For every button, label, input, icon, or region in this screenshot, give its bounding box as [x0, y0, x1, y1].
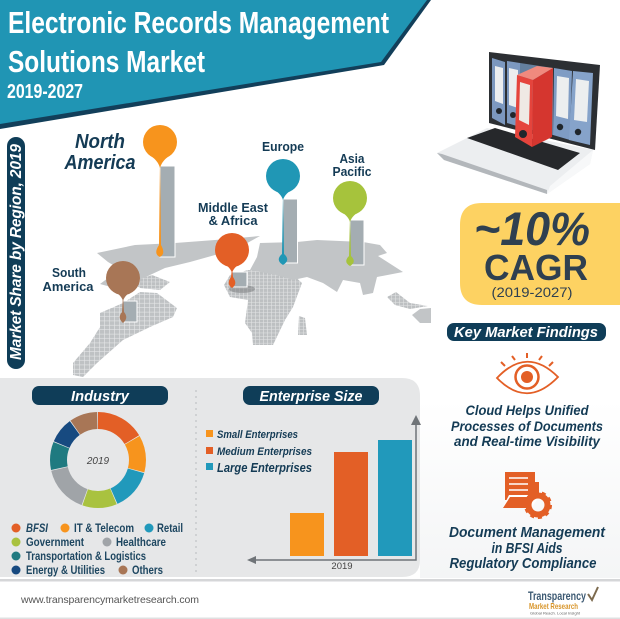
finding: cloud visibility: Processes of Documents	[451, 418, 603, 434]
label: south america: America	[42, 279, 94, 294]
pin: asia pacific	[333, 181, 367, 266]
heading: key market findings: Key Market Findings	[454, 324, 598, 341]
logo: transparency market research: Global Reach. Local Insight	[530, 610, 581, 616]
pin: north america	[143, 125, 177, 257]
title: main heading: Electronic Records Management	[8, 5, 389, 40]
legend: industry: Transportation & Logistics	[26, 549, 146, 563]
right column background	[420, 400, 620, 578]
legend: industry: Healthcare	[116, 535, 166, 549]
label: asia pacific: Pacific	[332, 164, 372, 179]
legend: industry: IT & Telecom	[74, 521, 134, 535]
title banner	[0, 0, 431, 129]
logo: transparency market research: Market Research	[529, 601, 578, 611]
donut chart	[58, 420, 138, 500]
map: central america	[132, 275, 170, 290]
donut centre year: 2019	[86, 456, 110, 467]
legend: industry	[12, 521, 183, 577]
bottom grey panel	[0, 378, 420, 577]
finding: cloud visibility: and Real-time Visibility	[454, 433, 601, 449]
legend: industry: Government	[26, 535, 84, 549]
label: asia pacific: Asia	[340, 151, 365, 166]
callout: cagr: CAGR	[484, 247, 588, 288]
legend: enterprise size: Medium Enterprises	[217, 446, 312, 458]
callout: cagr: (2019-2027)	[492, 284, 572, 300]
bar chart	[247, 415, 421, 572]
logo: transparency market research: Transparency	[528, 591, 586, 603]
finding: document management: Regulatory Compliance	[450, 555, 596, 572]
label: middle east and africa	[198, 200, 269, 228]
legend: enterprise size: Large Enterprises	[217, 461, 312, 475]
title: main heading: 2019-2027	[7, 81, 83, 103]
heading: industry	[32, 386, 168, 405]
map: madagascar	[298, 316, 307, 335]
finding: cloud visibility: Cloud Helps Unified	[466, 402, 589, 418]
legend: industry: BFSI	[26, 521, 49, 535]
finding: cloud visibility	[451, 402, 603, 449]
heading: enterprise size: Enterprise Size	[260, 388, 362, 405]
side label: market share by region: Market Share by Region, 2019	[8, 144, 25, 360]
legend: industry: Retail	[157, 521, 183, 535]
finding: document management: Document Management	[449, 524, 606, 541]
logo: transparency market research	[528, 587, 598, 616]
icon: document and gear	[503, 472, 550, 518]
pin: europe	[266, 159, 300, 265]
title: main heading	[7, 5, 389, 103]
panel: industry	[12, 386, 183, 577]
map: eurasia	[250, 240, 403, 295]
label: asia pacific	[332, 151, 372, 179]
callout: cagr: ~10%	[474, 202, 590, 255]
world map	[73, 236, 431, 377]
heading: industry: Industry	[71, 388, 130, 405]
label: north america	[64, 131, 136, 174]
finding: document management	[449, 524, 606, 572]
icon: eye	[497, 353, 558, 393]
footer divider	[0, 579, 620, 582]
footer website url: www.transparencymarketresearch.com	[20, 594, 199, 606]
label: middle east and africa: & Africa	[208, 213, 258, 228]
pin: middle east and africa	[215, 233, 255, 293]
label: middle east and africa: Middle East	[198, 200, 269, 215]
bar chart: 2019	[331, 561, 353, 572]
map: africa	[224, 270, 302, 345]
map: australia	[412, 308, 431, 323]
legend: enterprise size	[206, 429, 312, 475]
legend: industry: Energy & Utilities	[26, 563, 105, 577]
legend: industry: Others	[132, 563, 163, 577]
callout: cagr	[460, 202, 620, 305]
legend: enterprise size: Small Enterprises	[217, 429, 298, 441]
title: main heading: Solutions Market	[8, 44, 205, 79]
label: north america: America	[64, 152, 136, 174]
laptop with binders illustration	[437, 52, 600, 194]
map: north america	[97, 236, 260, 290]
label: south america	[42, 265, 94, 294]
label: europe: Europe	[262, 139, 304, 154]
pin: south america	[106, 261, 140, 323]
label: north america: North	[75, 131, 125, 153]
finding: document management: in BFSI Aids	[492, 540, 562, 557]
map: south america	[73, 292, 177, 377]
label: south america: South	[52, 265, 86, 280]
panel: enterprise size	[206, 386, 421, 572]
map: southeast asia	[387, 292, 428, 309]
